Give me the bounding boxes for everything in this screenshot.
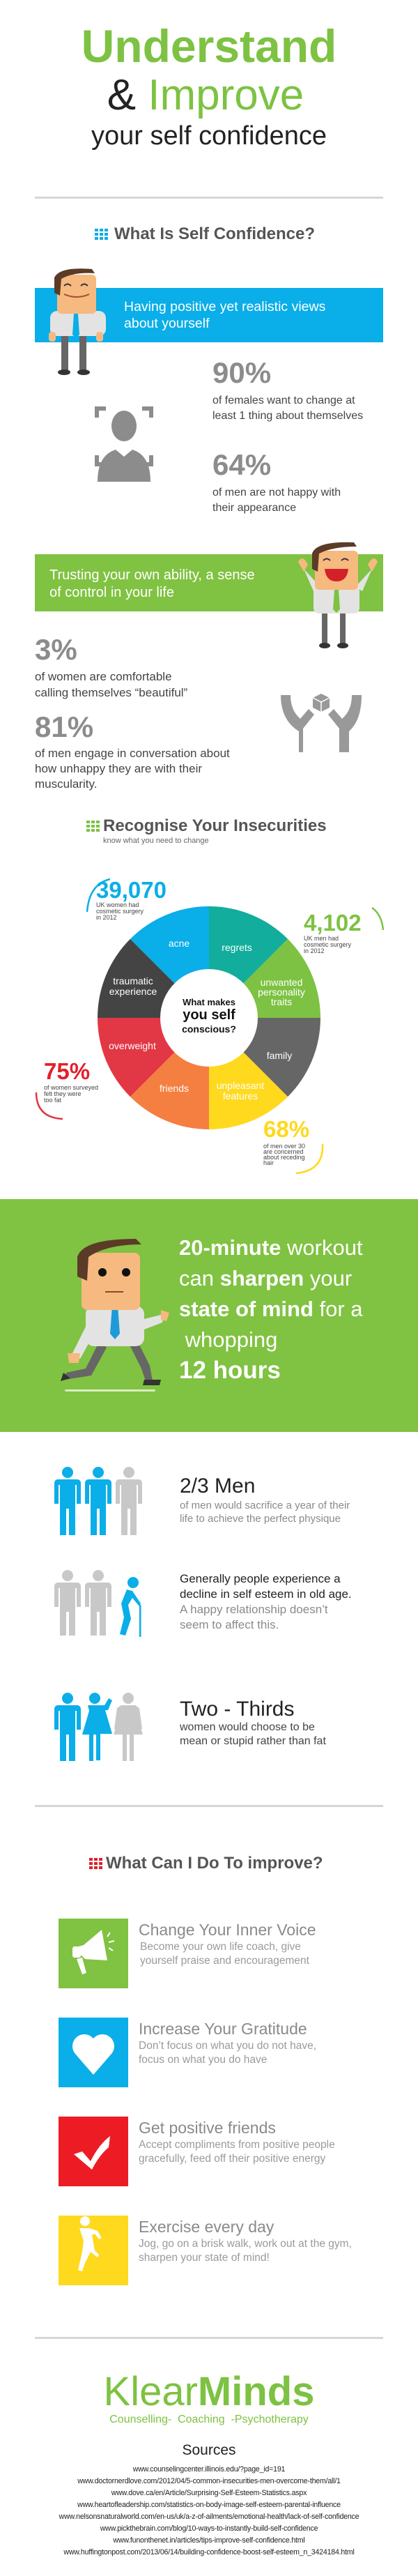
chart: insecurity wheel: family xyxy=(267,1050,292,1061)
heading: Recognise Your Insecurities xyxy=(86,816,327,845)
text: 20-minute workout: 20-minute workout xyxy=(179,1235,363,1260)
stat: 81%: 81% xyxy=(35,710,93,743)
sources: www.huffingtonpost.com/2013/06/14/building-confidence-boost-self-esteem_n_3424184.html xyxy=(63,2548,355,2556)
tip: Increase Your Gratitude: Increase Your Gratitude xyxy=(139,2020,307,2038)
tip: Increase Your Gratitude xyxy=(59,2018,316,2087)
callout: 75%: 75% xyxy=(44,1058,90,1084)
logo: KlearMinds: Counselling- Coaching -Psychotherapy xyxy=(109,2414,309,2425)
callout: 39,070 xyxy=(86,877,167,921)
callout: 4,102: 4,102 xyxy=(304,910,362,936)
callout: 68%: of men over 30 xyxy=(263,1143,305,1150)
stat: 90%: least 1 thing about themselves xyxy=(212,410,363,422)
callout: 39,070: in 2012 xyxy=(96,914,117,921)
stat: 64% xyxy=(212,448,341,514)
chart: insecurity wheel: unwanted xyxy=(261,977,302,988)
text: 20-minute workout: whopping xyxy=(185,1327,277,1352)
chart: insecurity wheel: unpleasant xyxy=(217,1080,264,1091)
panel: green band: of control in your life xyxy=(49,585,174,600)
icon: person frame xyxy=(95,406,153,482)
stat: 3% xyxy=(35,633,187,699)
stat row: Two-Thirds: mean or stupid rather than fat xyxy=(180,1735,326,1747)
tip: Get positive friends: Get positive friends xyxy=(139,2119,276,2137)
stat row: 2/3 Men: life to achieve the perfect physique xyxy=(180,1513,341,1525)
chart: insecurity wheel: regrets xyxy=(222,942,252,953)
callout: 39,070: cosmetic surgery xyxy=(96,908,144,915)
callout: 4,102: in 2012 xyxy=(304,947,325,954)
panel: blue band xyxy=(35,288,383,342)
chart: insecurity wheel: personality xyxy=(258,986,305,998)
stat: 81%: how unhappy they are with their xyxy=(35,762,202,775)
tip: Change Your Inner Voice: Become your own life coach, give xyxy=(140,1941,301,1953)
callout: 4,102: cosmetic surgery xyxy=(304,941,351,948)
stat row: old age: A happy relationship doesn’t xyxy=(180,1603,328,1616)
stat row: Two-Thirds xyxy=(54,1693,326,1761)
stat: 81%: of men engage in conversation about xyxy=(35,747,230,760)
icon: two men and elderly xyxy=(54,1570,141,1637)
stat: 90%: 90% xyxy=(212,356,271,389)
stat row: old age: seem to affect this. xyxy=(180,1618,279,1631)
sources: www.heartofleadership.com/statistics-on-body-image-self-esteem-parental-influence xyxy=(77,2501,341,2509)
icon: megaphone xyxy=(59,1919,128,1988)
chart: insecurity wheel: What makes xyxy=(183,997,235,1007)
stat: 81% xyxy=(35,710,230,791)
chart: insecurity wheel: conscious? xyxy=(182,1023,236,1035)
heading: Recognise Your Insecurities: know what you need to change xyxy=(103,837,209,845)
stat row: Two-Thirds: women would choose to be xyxy=(180,1721,315,1733)
tip: Get positive friends: gracefully, feed off their positive energy xyxy=(139,2153,325,2165)
icon: runner xyxy=(59,2216,128,2285)
icon: heart xyxy=(59,2018,128,2087)
chart: insecurity wheel: acne xyxy=(169,938,189,949)
sources: www.dove.ca/en/Article/Surprising-Self-Esteem-Statistics.aspx xyxy=(111,2489,307,2497)
callout: 68%: hair xyxy=(263,1159,274,1166)
stat: 3%: 3% xyxy=(35,633,77,666)
tip: Exercise every day: sharpen your state of mind! xyxy=(139,2252,270,2264)
stat row: old age: decline in self esteem in old age. xyxy=(180,1587,352,1601)
title xyxy=(82,20,336,151)
sources xyxy=(59,2442,359,2556)
chart: insecurity wheel: traumatic xyxy=(113,975,153,986)
chart: insecurity wheel: experience xyxy=(109,986,157,997)
tip: Increase Your Gratitude: focus on what you do have xyxy=(139,2054,267,2066)
chart: insecurity wheel: friends xyxy=(160,1083,189,1094)
stat row: 2/3 Men: 2/3 Men xyxy=(180,1474,255,1497)
logo: KlearMinds: KlearMinds xyxy=(104,2369,314,2414)
stat: 90% xyxy=(212,356,363,422)
callout: 75%: too fat xyxy=(44,1097,61,1104)
title: & Improve xyxy=(107,71,304,119)
chart: insecurity wheel xyxy=(98,906,320,1129)
heading: What Is Self Confidence: What Is Self Confidence? xyxy=(114,224,315,243)
heading: What Can I Do To improve: What Can I Do To improve? xyxy=(106,1854,323,1873)
callout: 75%: of women surveyed xyxy=(44,1084,98,1091)
sources: Sources xyxy=(182,2442,236,2458)
callout: 39,070: UK women had xyxy=(96,901,139,908)
tip: Exercise every day: Exercise every day xyxy=(139,2218,274,2236)
sources: www.funonthenet.in/articles/tips-improve-self-confidence.html xyxy=(113,2536,305,2545)
icon: three men xyxy=(54,1467,142,1535)
text: 20-minute workout: state of mind for a xyxy=(179,1297,363,1321)
text: 20-minute workout: can sharpen your xyxy=(179,1266,352,1290)
sources: www.pickthebrain.com/blog/10-ways-to-instantly-build-self-confidence xyxy=(100,2524,318,2533)
callout: 4,102 xyxy=(304,907,385,954)
stat: 64%: 64% xyxy=(212,448,271,481)
sources: www.doctornerdlove.com/2012/04/5-common-insecurities-men-overcome-them/all/1 xyxy=(77,2477,341,2485)
icon: happy man xyxy=(298,542,378,648)
panel: blue band: Having positive yet realistic views xyxy=(124,299,325,314)
text: 20-minute workout: 12 hours xyxy=(179,1357,281,1384)
stat row: 2/3 Men: of men would sacrifice a year of their xyxy=(180,1500,350,1511)
tip: Change Your Inner Voice: yourself praise and encouragement xyxy=(140,1955,309,1967)
sources: www.nelsonsnaturalworld.com/en-us/uk/a-z-of-ailments/emotional-health/lack-of-self-confidence xyxy=(59,2513,359,2521)
chart: insecurity wheel: features xyxy=(223,1090,258,1102)
heading: Recognise Your Insecurities: Recognise Your Insecurities xyxy=(103,816,327,835)
title: Understand xyxy=(82,20,336,72)
icon: running man xyxy=(61,1239,169,1392)
tip: Get positive friends: Accept compliments from positive people xyxy=(139,2139,335,2151)
icon: check mark xyxy=(59,2117,128,2186)
stat row: old age xyxy=(54,1570,352,1637)
tip: Exercise every day xyxy=(59,2216,352,2285)
chart: insecurity wheel: traits xyxy=(271,996,292,1007)
stat: 90%: of females want to change at xyxy=(212,395,355,406)
stat: 64%: of men are not happy with xyxy=(212,487,341,498)
icon: man and women xyxy=(54,1693,143,1761)
tip: Get positive friends xyxy=(59,2117,335,2186)
chart: insecurity wheel: you self xyxy=(183,1007,235,1023)
tip: Change Your Inner Voice xyxy=(59,1919,316,1988)
tip: Change Your Inner Voice: Change Your Inner Voice xyxy=(139,1921,316,1939)
panel: workout band xyxy=(0,1199,418,1432)
callout: 68%: about receding xyxy=(263,1154,305,1161)
stat: 3%: calling themselves “beautiful” xyxy=(35,686,187,699)
panel: green band xyxy=(35,554,383,611)
callout: 75%: felt they were xyxy=(44,1090,82,1097)
tip: Increase Your Gratitude: Don’t focus on what you do not have, xyxy=(139,2040,316,2052)
stat: 3%: of women are comfortable xyxy=(35,670,172,683)
text: 20-minute workout xyxy=(179,1235,363,1384)
icon: smiling man xyxy=(49,268,106,375)
sources: www.counselingcenter.illinois.edu/?page_id=191 xyxy=(133,2465,285,2474)
stat: 64%: their appearance xyxy=(212,502,296,514)
panel: blue band: about yourself xyxy=(124,316,209,331)
callout: 4,102: UK men had xyxy=(304,935,339,942)
title: your self confidence xyxy=(91,121,327,151)
stat row: Two-Thirds: Two - Thirds xyxy=(180,1698,294,1721)
chart: insecurity wheel: overweight xyxy=(109,1040,156,1051)
tip: Exercise every day: Jog, go on a brisk walk, work out at the gym, xyxy=(139,2238,352,2250)
icon: hands holding box xyxy=(281,694,362,752)
panel: green band: Trusting your own ability, a sense xyxy=(49,567,255,583)
callout: 68% xyxy=(263,1116,323,1174)
callout: 68%: 68% xyxy=(263,1116,309,1142)
callout: 68%: are concerned xyxy=(263,1148,304,1155)
stat row: 2/3 Men xyxy=(54,1467,350,1535)
stat row: old age: Generally people experience a xyxy=(180,1572,341,1585)
callout: 39,070: 39,070 xyxy=(96,877,167,903)
callout: 75% xyxy=(35,1058,98,1120)
stat: 81%: muscularity. xyxy=(35,777,97,791)
